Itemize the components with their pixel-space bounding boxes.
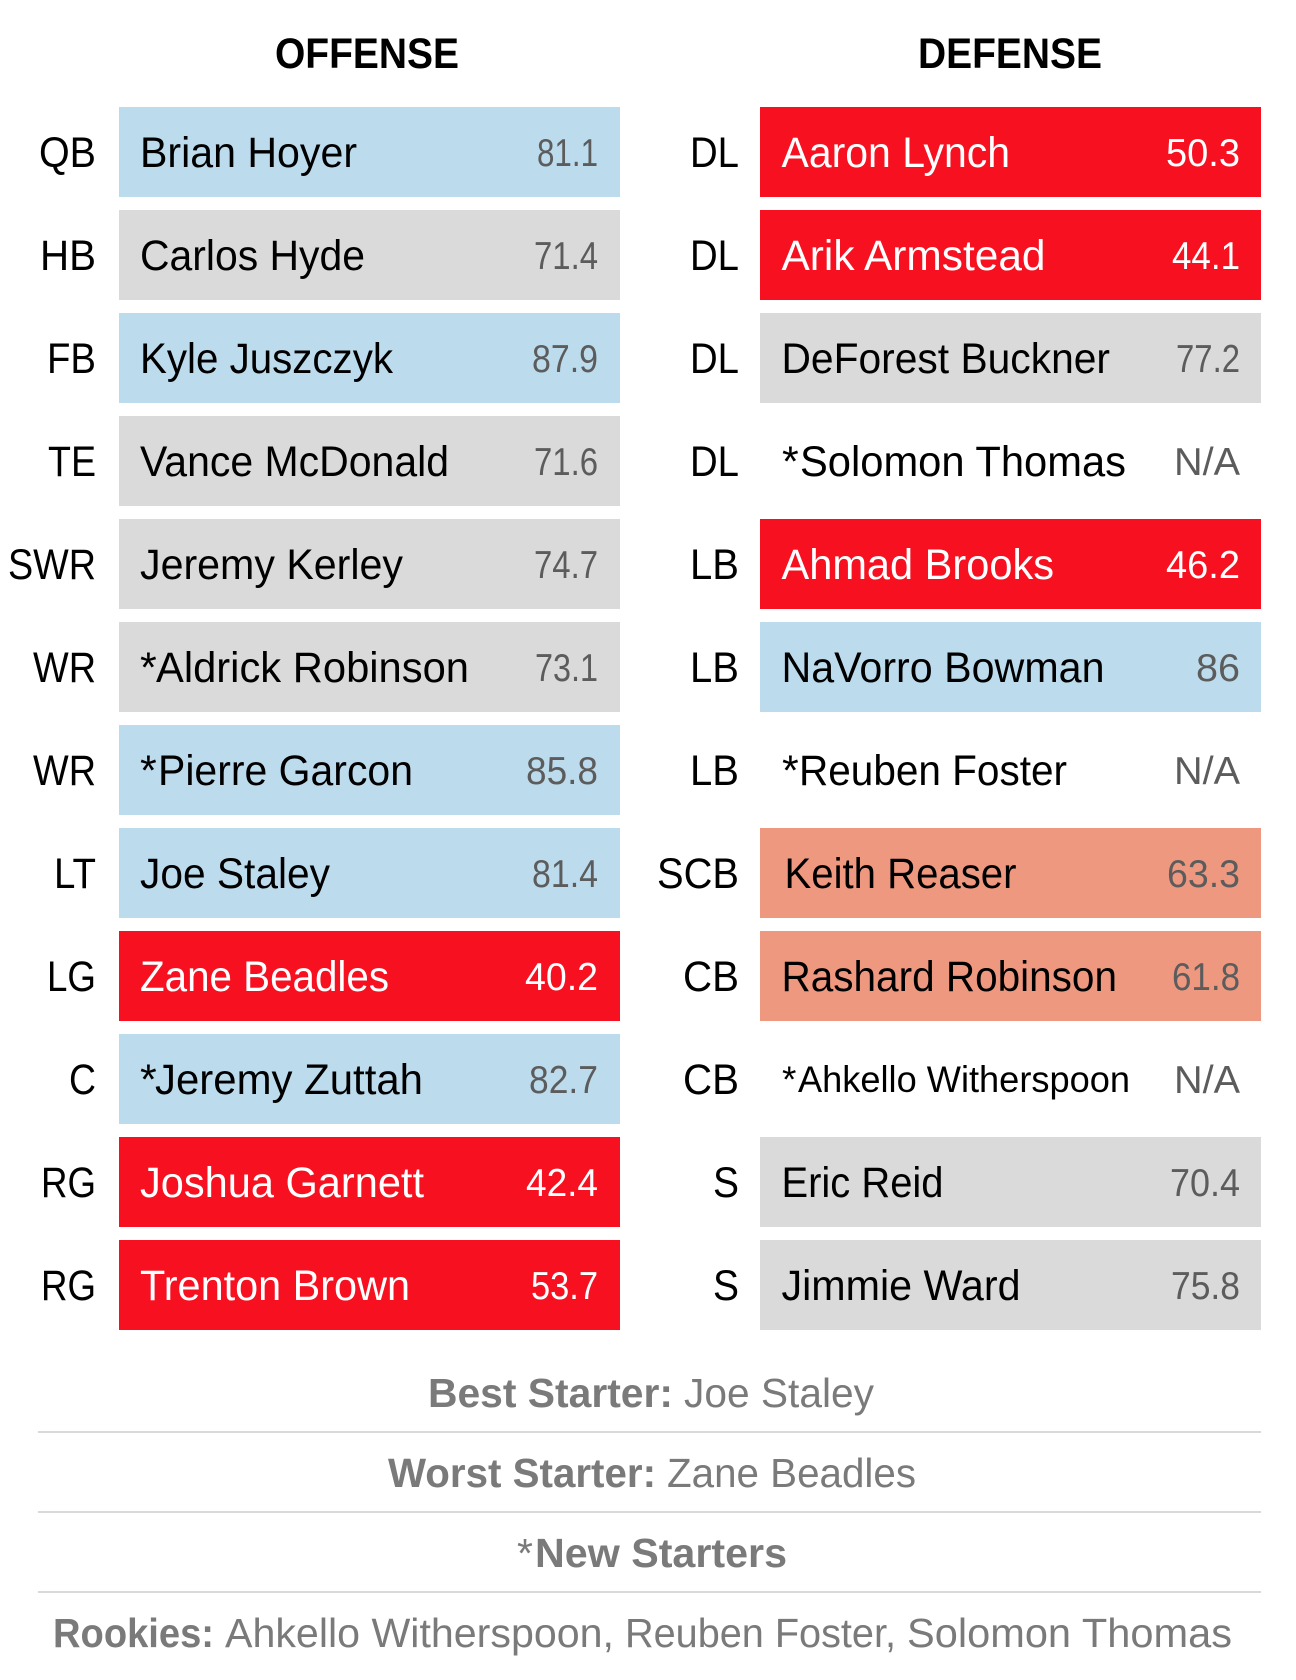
panel: defense roster — [657, 107, 1261, 1330]
row: WR Aldrick Robinson: WR — [33, 644, 96, 692]
row: RG Trenton Brown: RG — [41, 1262, 96, 1310]
row: RG Trenton Brown — [41, 1240, 620, 1330]
row: LG Zane Beadles — [47, 931, 620, 1021]
row: DL Arik Armstead: 44.1 — [1172, 235, 1240, 278]
row: C Jeremy Zuttah: 82.7 — [529, 1059, 598, 1102]
row: WR Pierre Garcon: WR — [33, 747, 96, 795]
row: LB Reuben Foster — [690, 747, 1240, 795]
row: DL DeForest Buckner — [690, 313, 1261, 403]
row: RG Trenton Brown: Trenton Brown — [140, 1262, 410, 1310]
row: LT Joe Staley: Joe Staley — [140, 850, 330, 898]
row: RG Joshua Garnett: RG — [41, 1159, 96, 1207]
row: WR Pierre Garcon: Pierre Garcon — [158, 747, 413, 795]
note: rookies: Ahkello Witherspoon, — [225, 1610, 614, 1656]
row: S Eric Reid — [713, 1137, 1261, 1227]
note: worst starter — [388, 1450, 916, 1496]
row: S Jimmie Ward: Jimmie Ward — [782, 1262, 1020, 1310]
row: DL Aaron Lynch: DL — [690, 129, 739, 177]
heading: offense: OFFENSE — [275, 30, 459, 78]
row: LB Reuben Foster: * — [782, 747, 799, 795]
row: LB NaVorro Bowman: NaVorro Bowman — [782, 644, 1104, 692]
note: rookies: Solomon Thomas — [907, 1610, 1232, 1656]
row: DL Aaron Lynch: Aaron Lynch — [782, 129, 1010, 177]
row: LB NaVorro Bowman: 86 — [1196, 647, 1240, 690]
row: DL Aaron Lynch: 50.3 — [1166, 132, 1240, 175]
note: worst starter: Zane Beadles — [667, 1450, 916, 1496]
row: DL Solomon Thomas: Solomon Thomas — [800, 438, 1126, 486]
row: HB Carlos Hyde: HB — [40, 232, 96, 280]
row: S Eric Reid: S — [713, 1159, 739, 1207]
row: QB Brian Hoyer: Brian Hoyer — [140, 129, 357, 177]
row: LB Reuben Foster: Reuben Foster — [799, 747, 1067, 795]
note: rookies: Reuben Foster, — [625, 1610, 896, 1656]
row: DL DeForest Buckner: DL — [690, 335, 739, 383]
row: DL Solomon Thomas: * — [782, 438, 799, 486]
row: TE Vance McDonald: 71.6 — [534, 441, 598, 484]
row: SWR Jeremy Kerley: SWR — [8, 541, 96, 589]
row: CB Rashard Robinson — [683, 931, 1261, 1021]
row: C Jeremy Zuttah: * — [140, 1056, 157, 1104]
row: CB Rashard Robinson: CB — [683, 953, 739, 1001]
row: DL Aaron Lynch — [690, 107, 1261, 197]
row: LG Zane Beadles: LG — [47, 953, 96, 1001]
row: RG Trenton Brown: 53.7 — [531, 1265, 598, 1308]
row: CB Ahkello Witherspoon: Ahkello Witherspoon — [798, 1059, 1130, 1100]
row: SCB Keith Reaser: 63.3 — [1167, 853, 1240, 896]
row: WR Aldrick Robinson: 73.1 — [535, 647, 598, 690]
row: DL DeForest Buckner: DeForest Buckner — [782, 335, 1110, 383]
row: TE Vance McDonald — [48, 416, 620, 506]
row: CB Ahkello Witherspoon: CB — [683, 1056, 739, 1104]
row: QB Brian Hoyer — [39, 107, 620, 197]
row: LB Ahmad Brooks: LB — [690, 541, 739, 589]
note: best starter: Best Starter: — [428, 1370, 673, 1416]
row: FB Kyle Juszczyk — [47, 313, 620, 403]
row: WR Aldrick Robinson — [33, 622, 620, 712]
row: SCB Keith Reaser — [657, 828, 1261, 918]
row: C Jeremy Zuttah: C — [69, 1056, 96, 1104]
row: LT Joe Staley: LT — [54, 850, 96, 898]
row: LB NaVorro Bowman: LB — [690, 644, 739, 692]
note: best starter: Joe Staley — [684, 1370, 874, 1416]
row: DL Arik Armstead: DL — [690, 232, 739, 280]
row: LB Reuben Foster: LB — [690, 747, 739, 795]
row: FB Kyle Juszczyk: 87.9 — [532, 338, 598, 381]
row: DL DeForest Buckner: 77.2 — [1176, 338, 1240, 381]
row: S Jimmie Ward: 75.8 — [1171, 1265, 1240, 1308]
panel: offense roster — [8, 107, 620, 1330]
note: rookies — [53, 1610, 1232, 1656]
heading: defense: DEFENSE — [918, 30, 1102, 78]
row: S Jimmie Ward: S — [713, 1262, 739, 1310]
row: SCB Keith Reaser: SCB — [657, 850, 739, 898]
row: LB Ahmad Brooks — [690, 519, 1261, 609]
row: QB Brian Hoyer: QB — [39, 129, 96, 177]
row: DL Arik Armstead: Arik Armstead — [782, 232, 1046, 280]
row: S Jimmie Ward — [713, 1240, 1261, 1330]
row: RG Joshua Garnett: Joshua Garnett — [140, 1159, 424, 1207]
row: WR Aldrick Robinson: Aldrick Robinson — [156, 644, 469, 692]
row: CB Rashard Robinson: Rashard Robinson — [782, 953, 1117, 1001]
row: SWR Jeremy Kerley: 74.7 — [534, 544, 598, 587]
row: WR Pierre Garcon — [33, 725, 620, 815]
row: LB NaVorro Bowman — [690, 622, 1261, 712]
row: SWR Jeremy Kerley: Jeremy Kerley — [140, 541, 403, 589]
row: DL Solomon Thomas: N/A — [1174, 441, 1240, 484]
row: WR Aldrick Robinson: * — [140, 644, 157, 692]
note: new starters: * — [517, 1530, 533, 1576]
row: CB Ahkello Witherspoon: N/A — [1174, 1059, 1240, 1102]
note: new starters: New Starters — [535, 1530, 787, 1576]
row: HB Carlos Hyde: 71.4 — [534, 235, 598, 278]
row: DL Arik Armstead — [690, 210, 1261, 300]
row: RG Joshua Garnett — [41, 1137, 620, 1227]
row: QB Brian Hoyer: 81.1 — [537, 132, 598, 175]
row: CB Ahkello Witherspoon — [683, 1056, 1240, 1104]
row: HB Carlos Hyde: Carlos Hyde — [140, 232, 365, 280]
row: CB Rashard Robinson: 61.8 — [1172, 956, 1240, 999]
row: DL Solomon Thomas: DL — [690, 438, 739, 486]
row: S Eric Reid: Eric Reid — [782, 1159, 944, 1207]
row: RG Joshua Garnett: 42.4 — [526, 1162, 598, 1205]
row: LT Joe Staley: 81.4 — [532, 853, 598, 896]
row: LG Zane Beadles: 40.2 — [525, 956, 598, 999]
row: FB Kyle Juszczyk: FB — [47, 335, 96, 383]
row: DL Solomon Thomas — [690, 438, 1240, 486]
row: LG Zane Beadles: Zane Beadles — [140, 953, 389, 1001]
row: HB Carlos Hyde — [40, 210, 620, 300]
row: LT Joe Staley — [54, 828, 620, 918]
note: rookies: Rookies: — [53, 1610, 214, 1656]
row: WR Pierre Garcon: 85.8 — [526, 750, 598, 793]
row: LB Ahmad Brooks: 46.2 — [1166, 544, 1240, 587]
row: S Eric Reid: 70.4 — [1170, 1162, 1240, 1205]
row: LB Ahmad Brooks: Ahmad Brooks — [782, 541, 1054, 589]
note: worst starter: Worst Starter: — [388, 1450, 656, 1496]
row: C Jeremy Zuttah: Jeremy Zuttah — [155, 1056, 423, 1104]
row: TE Vance McDonald: TE — [48, 438, 96, 486]
row: SCB Keith Reaser: Keith Reaser — [784, 850, 1016, 898]
row: FB Kyle Juszczyk: Kyle Juszczyk — [140, 335, 393, 383]
note: best starter — [428, 1370, 874, 1416]
row: LB Reuben Foster: N/A — [1174, 750, 1240, 793]
row: CB Ahkello Witherspoon: * — [782, 1059, 796, 1100]
row: C Jeremy Zuttah — [69, 1034, 620, 1124]
row: WR Pierre Garcon: * — [140, 747, 157, 795]
row: TE Vance McDonald: Vance McDonald — [140, 438, 449, 486]
row: SWR Jeremy Kerley — [8, 519, 620, 609]
